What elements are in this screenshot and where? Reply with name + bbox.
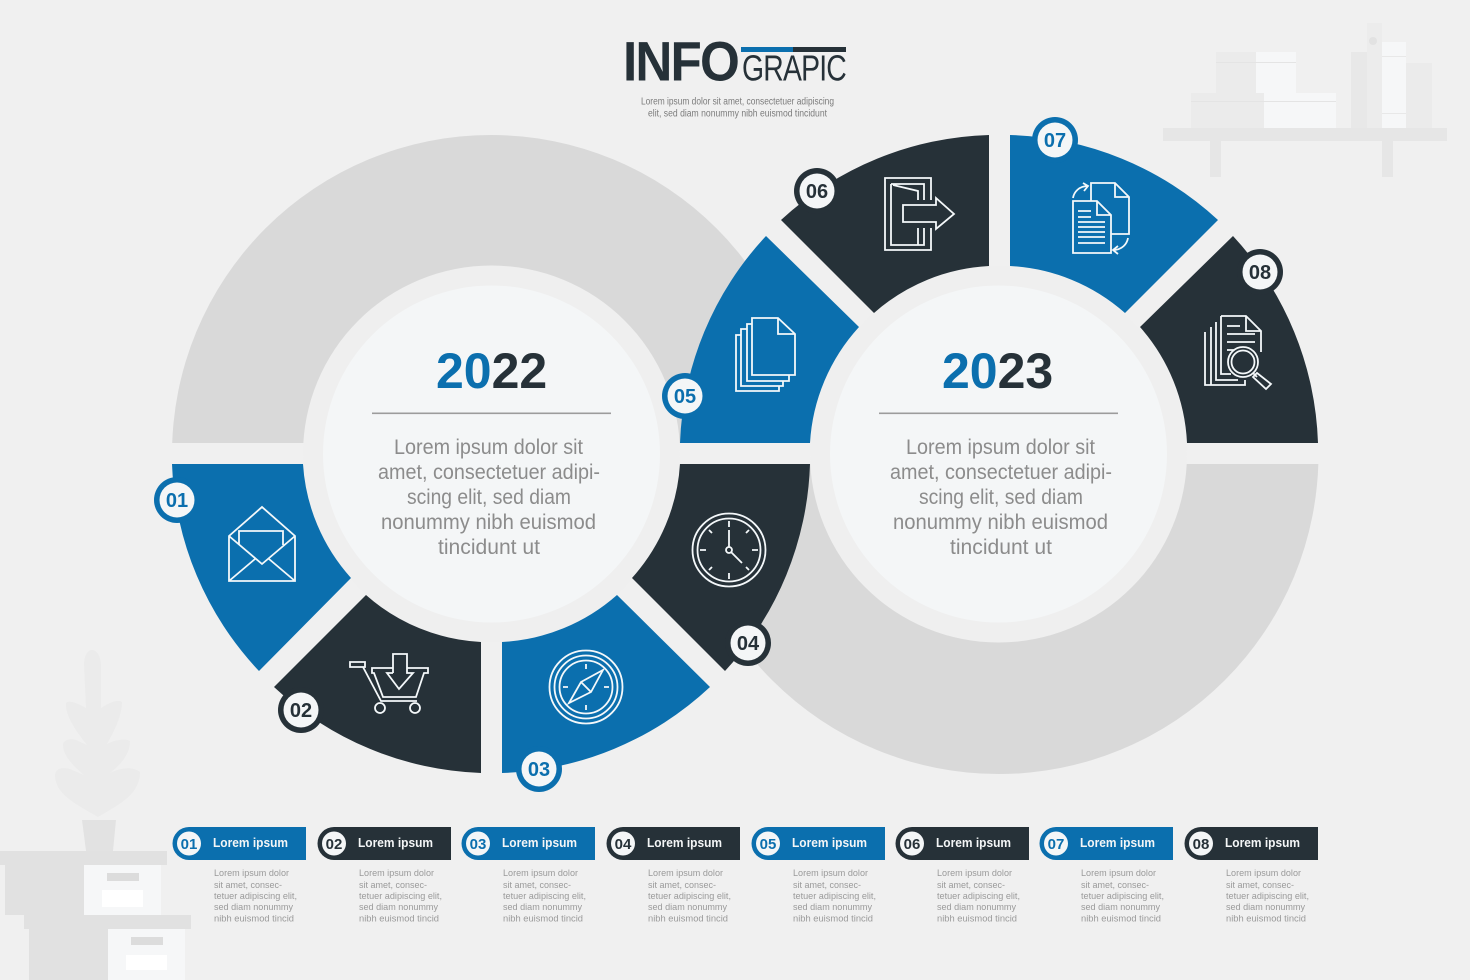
- legend item 01: nibh euismod tincid: [214, 914, 294, 924]
- legend item 08: nibh euismod tincid: [1226, 914, 1306, 924]
- legend item 01: sed diam nonummy: [214, 902, 293, 913]
- legend item 05: [752, 827, 885, 924]
- decoration: plant on drawers: [0, 650, 191, 980]
- legend item 02: [318, 827, 451, 924]
- icon: cart wheels: [375, 703, 420, 713]
- legend item 08: Lorem ipsum: [1225, 835, 1300, 850]
- legend item 01: sit amet, consec-: [214, 880, 282, 891]
- legend item 03: 03: [470, 836, 486, 853]
- title: GRAPIC: [742, 48, 846, 88]
- legend item 03: tetuer adipiscing elit,: [503, 891, 586, 902]
- segment 03: compass: [502, 595, 710, 792]
- legend item 01: Lorem ipsum: [213, 835, 288, 850]
- legend item 08: [1184, 827, 1318, 924]
- icon: stacked documents: [736, 318, 795, 391]
- panel: 2022 circle: tincidunt ut: [438, 536, 540, 559]
- panel: 2023 circle: [810, 266, 1187, 642]
- panel: 2023 circle: scing elit, sed diam: [919, 486, 1083, 509]
- legend item 07: nibh euismod tincid: [1081, 914, 1161, 924]
- segment 07: document exchange: 07: [1044, 130, 1066, 152]
- legend item 02: sed diam nonummy: [359, 902, 438, 913]
- legend item 06: [896, 827, 1029, 924]
- segment 08: document search: 08: [1249, 262, 1271, 284]
- legend item 02: nibh euismod tincid: [359, 914, 439, 924]
- legend item 03: nibh euismod tincid: [503, 914, 583, 924]
- panel: 2023 circle: tincidunt ut: [950, 536, 1052, 559]
- legend item 04: [606, 827, 740, 924]
- legend item 01: tetuer adipiscing elit,: [214, 891, 297, 902]
- legend item 06: tetuer adipiscing elit,: [937, 891, 1020, 902]
- legend item 03: Lorem ipsum: [502, 835, 577, 850]
- icon: document exchange: [1073, 183, 1129, 254]
- subtitle: [641, 96, 834, 120]
- panel: 2022 circle: nonummy nibh euismod: [381, 511, 596, 534]
- legend item 06: Lorem ipsum: [936, 835, 1011, 850]
- legend item 07: sit amet, consec-: [1081, 880, 1149, 891]
- legend item 08: 08: [1193, 836, 1209, 853]
- legend item 06: nibh euismod tincid: [937, 914, 1017, 924]
- legend item 07: Lorem ipsum: [1080, 835, 1155, 850]
- segment 06: door exit: [781, 135, 989, 313]
- legend item 05: sed diam nonummy: [793, 902, 872, 913]
- panel: 2022 circle: amet, consectetuer adipi-: [378, 461, 600, 484]
- grey ring: left top half: [172, 135, 745, 443]
- legend item 06: 06: [904, 836, 920, 853]
- legend item 03: [462, 827, 595, 924]
- legend item 02: 02: [326, 836, 342, 853]
- legend item 07: tetuer adipiscing elit,: [1081, 891, 1164, 902]
- segment 01: envelope: [154, 464, 351, 671]
- panel: 2022 circle: Lorem ipsum dolor sit: [394, 436, 583, 459]
- panel: 2023 circle: 2023: [942, 343, 1053, 399]
- segment 04: clock: 04: [737, 633, 760, 655]
- grey ring: right bottom half: [679, 464, 1318, 774]
- panel: 2022 circle: scing elit, sed diam: [407, 486, 571, 509]
- segment 02: cart: 02: [290, 700, 312, 722]
- legend item 08: sit amet, consec-: [1226, 880, 1294, 891]
- legend item 04: 04: [615, 836, 632, 853]
- legend item 02: Lorem ipsum dolor: [359, 868, 434, 879]
- legend item 08: tetuer adipiscing elit,: [1226, 891, 1309, 902]
- legend item 07: sed diam nonummy: [1081, 902, 1160, 913]
- icon: envelope: [229, 507, 295, 581]
- segment 06: door exit: 06: [806, 181, 828, 203]
- legend item 04: Lorem ipsum: [647, 835, 722, 850]
- legend item 07: Lorem ipsum dolor: [1081, 868, 1156, 879]
- decoration: shelf with boxes and books: [1163, 23, 1447, 177]
- legend item 04: sit amet, consec-: [648, 880, 716, 891]
- legend item 06: sit amet, consec-: [937, 880, 1005, 891]
- legend item 03: Lorem ipsum dolor: [503, 868, 578, 879]
- icon: document search: [1205, 316, 1271, 389]
- segment 01: envelope: 01: [166, 490, 188, 512]
- legend item 03: sed diam nonummy: [503, 902, 582, 913]
- legend item 04: tetuer adipiscing elit,: [648, 891, 731, 902]
- panel: 2022 circle: 2022: [436, 343, 547, 399]
- legend item 01: 01: [181, 836, 197, 853]
- panel: 2023 circle: Lorem ipsum dolor sit: [906, 436, 1095, 459]
- legend item 05: tetuer adipiscing elit,: [793, 891, 876, 902]
- legend item 02: tetuer adipiscing elit,: [359, 891, 442, 902]
- segment 03: compass: 03: [528, 759, 550, 781]
- legend item 06: sed diam nonummy: [937, 902, 1016, 913]
- icon: clock: [692, 514, 766, 586]
- segment 05: stacked documents: 05: [674, 386, 696, 408]
- legend item 02: Lorem ipsum: [358, 835, 433, 850]
- legend item 05: Lorem ipsum dolor: [793, 868, 868, 879]
- icon: shopping cart: [350, 654, 428, 701]
- legend item 05: nibh euismod tincid: [793, 914, 873, 924]
- segment 04: clock: [632, 464, 810, 671]
- legend item 04: Lorem ipsum dolor: [648, 868, 723, 879]
- legend item 07: [1040, 827, 1173, 924]
- legend item 04: nibh euismod tincid: [648, 914, 728, 924]
- legend item 05: 05: [760, 836, 776, 853]
- legend item 04: sed diam nonummy: [648, 902, 727, 913]
- legend item 08: Lorem ipsum dolor: [1226, 868, 1301, 879]
- icon: compass: [550, 650, 622, 724]
- subtitle: elit, sed diam nonummy nibh euismod tincidunt: [648, 108, 827, 120]
- legend item 08: sed diam nonummy: [1226, 902, 1305, 913]
- legend item 07: 07: [1048, 836, 1064, 853]
- legend item 05: Lorem ipsum: [792, 835, 867, 850]
- legend item 01: Lorem ipsum dolor: [214, 868, 289, 879]
- icon: door with arrow: [885, 178, 954, 250]
- panel: 2023 circle: amet, consectetuer adipi-: [890, 461, 1112, 484]
- panel: 2022 circle: [303, 266, 680, 642]
- legend item 06: Lorem ipsum dolor: [937, 868, 1012, 879]
- legend item 02: sit amet, consec-: [359, 880, 427, 891]
- title: [623, 30, 846, 92]
- subtitle: Lorem ipsum dolor sit amet, consectetuer adipiscing: [641, 96, 834, 108]
- segment 02: cart: [274, 595, 481, 773]
- legend item 03: sit amet, consec-: [503, 880, 571, 891]
- panel: 2023 circle: nonummy nibh euismod: [893, 511, 1108, 534]
- legend item 05: sit amet, consec-: [793, 880, 861, 891]
- legend item 01: [172, 827, 306, 924]
- segment 05: stacked documents: [662, 236, 859, 443]
- title: INFO: [623, 30, 738, 92]
- segment 07: document exchange: [1010, 117, 1218, 313]
- segment 08: document search: [1140, 236, 1318, 443]
